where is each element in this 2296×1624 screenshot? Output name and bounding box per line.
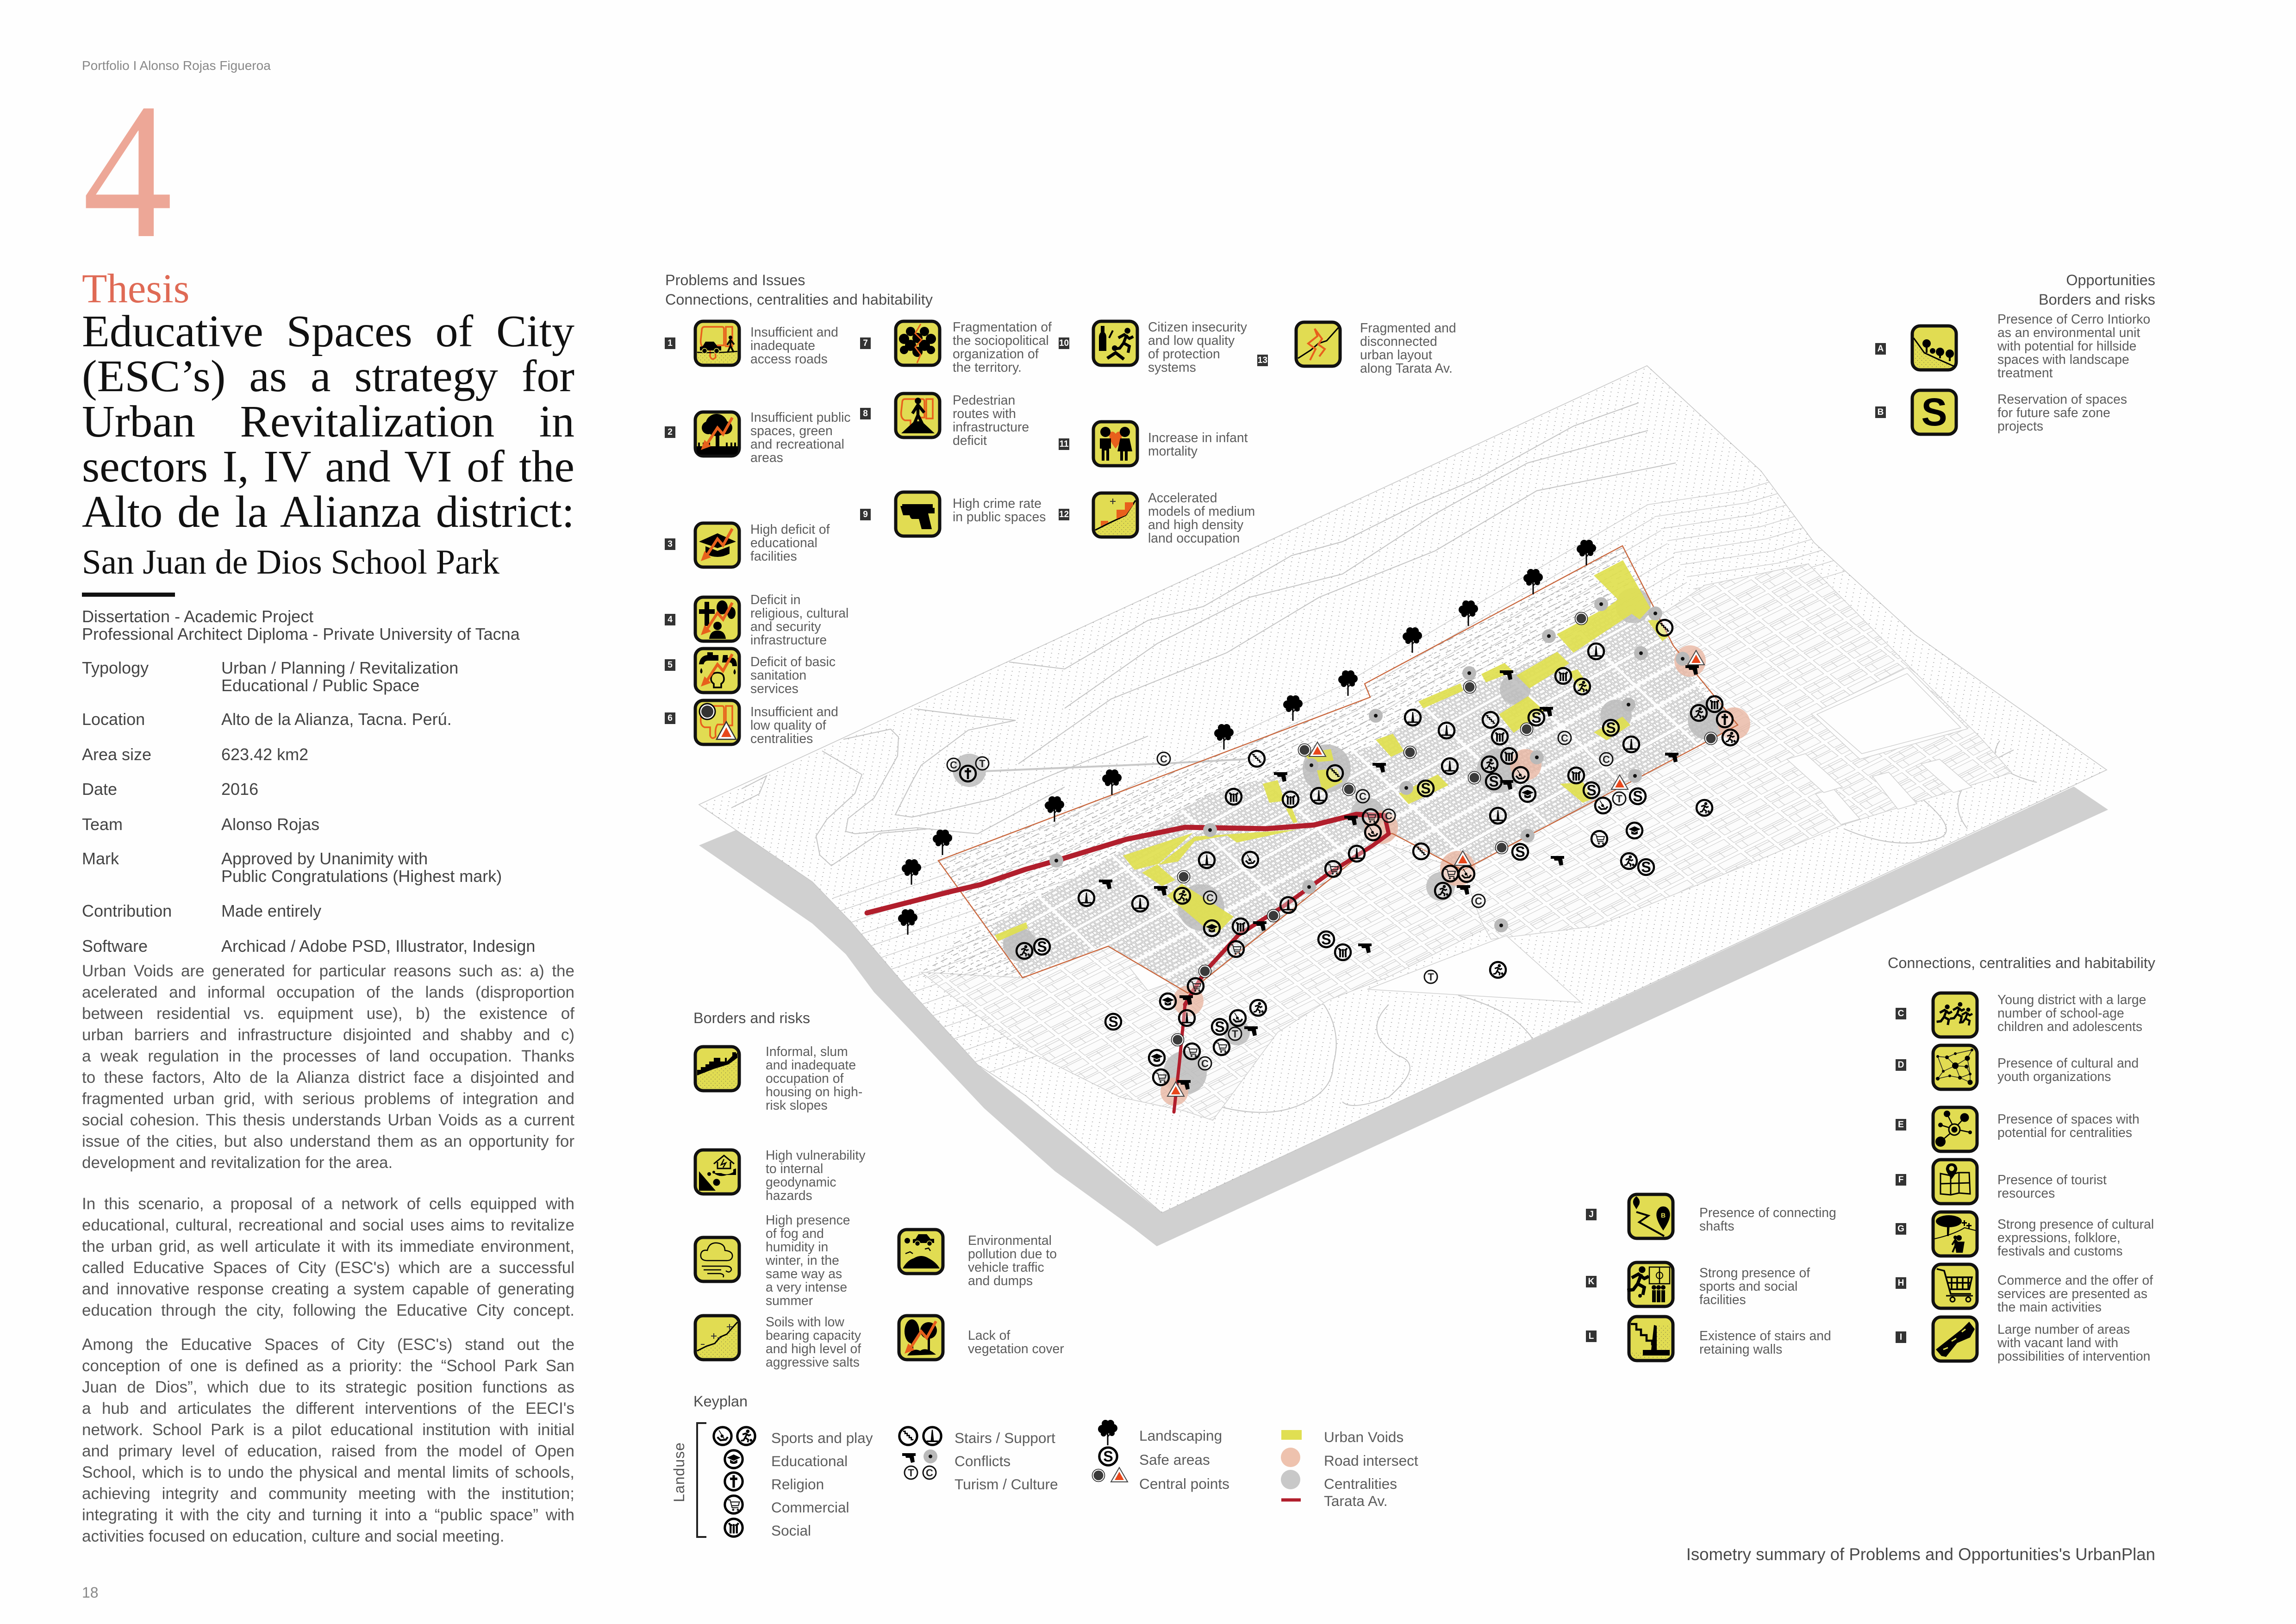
- area and route swatches: [1273, 1421, 1310, 1509]
- text: commerce: Commerce and the offer of services are presented as the main activities: [1997, 1273, 2153, 1314]
- tourism and culture markers: T: [1428, 971, 1434, 983]
- text: vegetation: Lack of vegetation cover: [968, 1328, 1064, 1356]
- date: [82, 781, 574, 798]
- area size: 623.42 km2: [221, 745, 308, 764]
- paragraph 3: Juan de Dios”, which due to its strategic position functions as: [82, 1378, 574, 1396]
- icon: insecurity scene: [1092, 319, 1139, 367]
- contribution: Contribution: [82, 901, 172, 920]
- paragraph 2: educational, cultural, recreational and social uses aims to revitalize: [82, 1216, 574, 1234]
- icon: tree, crosses and dancers: [1931, 1210, 1979, 1258]
- stairs, conflicts and tourism labels: Stairs / Support Conflicts Turism / Culture: [955, 1430, 1058, 1493]
- legend symbols: [671, 1389, 1134, 1546]
- mark: Approved by Unanimity with Public Congratulations (Highest mark): [221, 849, 502, 886]
- safe area S markers: S: [1641, 859, 1651, 875]
- badge 6: [665, 712, 675, 724]
- paragraph 3: [82, 1334, 574, 1547]
- badge B: [1875, 406, 1886, 418]
- trees landscaping: [898, 540, 1596, 935]
- icon: vacant land strip: [1931, 1315, 1979, 1363]
- icon: hub and spokes: [1931, 1106, 1979, 1153]
- badge I: I: [1900, 1332, 1902, 1342]
- mark: Mark: [82, 849, 119, 868]
- text: crime rate: High crime rate in public spaces: [953, 496, 1046, 524]
- badge E: [1896, 1119, 1906, 1131]
- panel: problems and issues: [662, 269, 1463, 750]
- location: [82, 711, 574, 728]
- urban voids yellow areas: [995, 560, 1669, 941]
- icon: pistol: [894, 490, 942, 538]
- badge J: J: [1589, 1210, 1594, 1219]
- text: fragmented layout: Fragmented and disconnected urban layout along Tarata Av.: [1360, 320, 1456, 375]
- icon: faucets and bulb: [693, 647, 741, 694]
- badge 5: 5: [668, 660, 673, 670]
- icon: slum on slope: [693, 1045, 741, 1093]
- panel: thesis header: [79, 56, 579, 602]
- icon: safe zone S: S: [1921, 390, 1947, 434]
- paragraph 3: activities focused on education, culture and social meeting.: [82, 1527, 504, 1545]
- badge L: L: [1589, 1331, 1594, 1341]
- area size: Area size: [82, 745, 151, 764]
- portfolio line: Portfolio I Alonso Rojas Figueroa: [82, 58, 271, 73]
- stairs, support, conflicts, tourism symbols: C: [926, 1467, 933, 1479]
- badge 9: [860, 509, 871, 520]
- text: potential centralities: Presence of spaces with potential for centralities: [1997, 1112, 2140, 1140]
- text: connecting shafts: Presence of connecting shafts: [1699, 1205, 1836, 1233]
- borders heading: Borders and risks: [693, 1010, 810, 1026]
- location: Alto de la Alianza, Tacna. Perú.: [221, 710, 452, 729]
- icon: football and social: [1627, 1261, 1675, 1308]
- tourism and culture markers: C: [1475, 895, 1482, 907]
- badge 1: 1: [668, 338, 673, 348]
- team: [82, 816, 574, 833]
- text: sports and social: Strong presence of sports and social facilities: [1699, 1265, 1810, 1307]
- stairs and support markers: [1079, 620, 1672, 1026]
- text: tourist resources: Presence of tourist resources: [1997, 1172, 2107, 1200]
- contribution: [82, 902, 574, 920]
- paragraph 3: and primary level of education, raised from the model of Open: [82, 1442, 574, 1460]
- badge G: G: [1897, 1224, 1904, 1234]
- landscaping, safe areas and central points labels: Landscaping Safe areas Central points: [1139, 1427, 1229, 1492]
- software: [82, 937, 574, 955]
- icon: organizations network: [1931, 1043, 1979, 1091]
- text: public spaces: Insufficient public spaces, green and recreational areas: [750, 410, 851, 465]
- badge F: [1896, 1174, 1906, 1186]
- text: young district: Young district with a large number of school-age children and adolescents: [1997, 992, 2146, 1034]
- opportunities heading: Opportunities Borders and risks: [2039, 272, 2155, 308]
- icon: density slope: [1092, 491, 1139, 539]
- problems heading: Problems and Issues Connections, centralities and habitability: [665, 272, 933, 308]
- conflict pistol markers: [1099, 665, 1699, 1090]
- terrain contours: [731, 403, 2037, 1112]
- paragraph 2: the urban grid, as well articulate it with its immediate environment,: [82, 1237, 574, 1255]
- typology: Urban / Planning / Revitalization Educational / Public Space: [221, 658, 458, 695]
- safe area S markers: S: [1531, 709, 1541, 726]
- landuse symbols: [714, 1427, 755, 1537]
- badge 12: 12: [1059, 510, 1069, 519]
- landuse labels: Sports and play Educational Religion Commercial Social: [771, 1430, 873, 1539]
- dissertation lines: Dissertation - Academic Project Professional Architect Diploma - Private University of Tacna: [82, 607, 520, 643]
- badge H: H: [1898, 1278, 1904, 1288]
- text: sanitation: Deficit of basic sanitation services: [750, 654, 836, 696]
- centralities grey circles: [953, 588, 1728, 1094]
- icon: cloud and wind: [693, 1236, 741, 1283]
- badge 1: [665, 337, 675, 349]
- main title: Alto de la Alianza district:: [82, 487, 574, 537]
- paragraph 1: social cohesion. This thesis understands Urban Voids as a current: [82, 1111, 574, 1129]
- badge 9: 9: [863, 510, 868, 519]
- text: informal slum: Informal, slum and inadequate occupation of housing on high- risk slopes: [766, 1044, 862, 1112]
- badge L: [1586, 1330, 1597, 1342]
- icon: map and pin: [1931, 1158, 1979, 1206]
- icon: trees and zigzag: [897, 1314, 945, 1362]
- tourism and culture markers: C: [1603, 754, 1610, 765]
- paragraph 1: fragmented urban grid, with serious problems of integration and: [82, 1090, 574, 1108]
- date: Date: [82, 780, 117, 799]
- badge E: E: [1898, 1120, 1904, 1130]
- icon: cross, masks and bust: [693, 595, 741, 643]
- badge K: [1586, 1276, 1597, 1287]
- badge K: K: [1588, 1277, 1594, 1287]
- icon: connecting shaft: B: [1661, 1212, 1666, 1219]
- icon: car and thumb down: [693, 319, 741, 367]
- safe area S markers: S: [1215, 1018, 1225, 1035]
- text: Cerro Intiorko: Presence of Cerro Intiorko as an environmental unit with potential for hillside spaces with landscape treatment: [1997, 312, 2150, 380]
- landscaping, safe area, central point symbols: [1092, 1420, 1128, 1482]
- badge G: [1896, 1223, 1906, 1235]
- study area boundary: [938, 546, 1738, 993]
- text: pedestrian routes: Pedestrian routes with infrastructure deficit: [953, 393, 1029, 448]
- central points dark dots: [1171, 612, 1717, 1046]
- text: soils: Soils with low bearing capacity and high level of aggressive salts: [766, 1314, 861, 1369]
- badge A: A: [1878, 344, 1884, 354]
- team: Alonso Rojas: [221, 815, 319, 834]
- badge 8: 8: [863, 409, 868, 418]
- location: Location: [82, 710, 145, 729]
- panel: centre opportunities: [1583, 1190, 1842, 1366]
- badge 11: 11: [1059, 439, 1069, 449]
- icon: pedestrian: [894, 392, 942, 439]
- typology: [82, 659, 574, 677]
- paragraph 1: a weak regulation in the processes of land occupation. Thanks: [82, 1047, 574, 1065]
- text: citizen insecurity: Citizen insecurity and low quality of protection systems: [1148, 319, 1247, 375]
- tourism and culture markers: C: [950, 759, 957, 771]
- icon: tree and zigzag: [693, 410, 741, 458]
- stairs, support, conflicts, tourism symbols: T: [908, 1467, 914, 1479]
- icon: safe zone S: [1910, 388, 1958, 436]
- sparse hillside houses: [917, 546, 1738, 993]
- main title: (ESC’s) as a strategy for: [82, 351, 574, 401]
- main title: sectors I, IV and VI of the: [82, 442, 574, 492]
- road intersection peach circles: [1160, 645, 1750, 1106]
- paragraph 1: urban barriers and infrastructure disjointed and shabby and c): [82, 1026, 574, 1044]
- safe area S markers: S: [1586, 782, 1597, 799]
- landuse bracket and label: Landuse: [671, 1442, 687, 1502]
- text: cultural expressions: Strong presence of cultural expressions, folklore, festivals and customs: [1997, 1217, 2154, 1258]
- text: access roads: Insufficient and inadequate access roads: [750, 325, 838, 366]
- badge 7: 7: [863, 338, 868, 348]
- text: vacant land: Large number of areas with vacant land with possibilities of intervention: [1997, 1322, 2150, 1363]
- icon: connecting shaft: [1627, 1193, 1675, 1240]
- paragraph 2: [82, 1193, 574, 1321]
- connections heading: Connections, centralities and habitability: [1888, 955, 2155, 971]
- icon: crowd fragmentation: [894, 319, 942, 367]
- keyplan heading: Keyplan: [693, 1393, 748, 1410]
- landscaping, safe area, central point symbols: S: [1103, 1448, 1113, 1465]
- tourism and culture markers: C: [1201, 1058, 1209, 1069]
- text: pollution: Environmental pollution due to vehicle traffic and dumps: [968, 1233, 1057, 1288]
- tourism and culture markers: T: [1616, 793, 1622, 805]
- formal city blocks: [921, 564, 2012, 1120]
- paragraph 1: development and revitalization for the area.: [82, 1154, 393, 1172]
- text: infant mortality: Increase in infant mortality: [1148, 430, 1248, 458]
- typology: Typology: [82, 658, 149, 677]
- paragraph 2: In this scenario, a proposal of a network of cells equipped with: [82, 1195, 574, 1213]
- paragraph 1: acelerated and informal occupation of the lands (disproportion: [82, 983, 574, 1001]
- safe area S markers: S: [1421, 780, 1431, 797]
- main title: [82, 309, 574, 535]
- text: centralities: Insufficient and low quality of centralities: [750, 704, 838, 746]
- icon: graduation cap: [693, 521, 741, 569]
- mark: [82, 850, 574, 868]
- paragraph 2: and innovative response creating a system capable of generating: [82, 1280, 574, 1298]
- icon: geodynamic hazards: [693, 1148, 741, 1196]
- safe area S markers: S: [1108, 1013, 1118, 1030]
- title rule: [82, 593, 175, 597]
- badge C: [1896, 1008, 1906, 1019]
- icon: central point and triangle: [693, 699, 741, 746]
- hillside contour lines: [833, 463, 1885, 1093]
- tourism and culture markers: T: [979, 758, 986, 769]
- paragraph 1: Urban Voids are generated for particular reasons such as: a) the: [82, 962, 574, 980]
- map caption: Isometry summary of Problems and Opportunities's UrbanPlan: [1686, 1545, 2155, 1564]
- text: religious, cultural and security: Deficit in religious, cultural and security infrastructure: [750, 592, 849, 647]
- badge 2: [665, 426, 675, 438]
- tourism and culture markers: C: [1160, 753, 1167, 765]
- badge H: [1896, 1277, 1906, 1289]
- stairs, support, conflicts, tourism symbols: [899, 1427, 941, 1479]
- stippled terrain sheet: [699, 366, 2107, 1213]
- icon: hill with trees: [1910, 324, 1958, 372]
- connection line: [983, 759, 1245, 771]
- tourism and culture markers: C: [1359, 791, 1366, 802]
- page number: 18: [82, 1584, 99, 1601]
- badge 8: [860, 408, 871, 419]
- badge 4: [665, 614, 675, 625]
- panel: borders and risks: [690, 1005, 1106, 1375]
- panel: opportunities borders and risks: [1870, 269, 2157, 440]
- contribution: Made entirely: [221, 901, 321, 920]
- safe area S markers: S: [1489, 773, 1499, 790]
- safe area S markers: [1034, 709, 1654, 1035]
- central points grey dots: [1049, 597, 1690, 932]
- safe area S markers: S: [1037, 938, 1047, 955]
- dense informal housing fabric: [991, 616, 1717, 992]
- icon: running children: [1931, 991, 1979, 1039]
- grey base slab: [699, 787, 2108, 1246]
- urban voids, road intersect and centralities labels: Urban Voids Road intersect Centralities: [1324, 1429, 1418, 1492]
- safe area S markers: S: [1321, 931, 1331, 948]
- badge 13: 13: [1258, 356, 1267, 365]
- safe area S markers: S: [1515, 843, 1525, 860]
- text: safe zones: Reservation of spaces for future safe zone projects: [1997, 392, 2127, 433]
- panel: project data: [79, 606, 579, 958]
- subtitle: San Juan de Dios School Park: [82, 543, 499, 581]
- badge J: [1586, 1209, 1597, 1220]
- chapter number: 4: [82, 63, 173, 278]
- sports markers: [1017, 679, 1738, 1026]
- badge 3: 3: [668, 539, 673, 549]
- software: Archicad / Adobe PSD, Illustrator, Indesign: [221, 937, 535, 956]
- paragraph 2: called Educative Spaces of City (ESC's) which are a successful: [82, 1259, 574, 1277]
- paragraph 1: [82, 961, 574, 1174]
- software: Software: [82, 937, 148, 956]
- isometric urban plan map: [698, 365, 2108, 1246]
- panel: thesis description: [79, 958, 579, 1546]
- badge I: [1896, 1331, 1906, 1343]
- icon: stairs and wall: [1627, 1315, 1675, 1362]
- badge 4: 4: [668, 615, 673, 625]
- badge 2: 2: [668, 427, 673, 437]
- tourism and culture markers: C: [1206, 892, 1214, 904]
- text: stairs and walls: Existence of stairs and retaining walls: [1699, 1328, 1831, 1356]
- date: 2016: [221, 780, 258, 799]
- icon: car and dump: [897, 1228, 945, 1275]
- icon: soil salts: [693, 1314, 741, 1362]
- paragraph 3: achieving integrity and community meeting with the institution;: [82, 1485, 574, 1503]
- badge A: [1875, 343, 1886, 355]
- Tarata Av. red road: [867, 814, 1389, 1112]
- landuse bracket and label: [671, 1423, 706, 1537]
- badge B: B: [1878, 407, 1884, 417]
- icon: fragmented layout: [1294, 320, 1342, 368]
- main title: Educative Spaces of City: [82, 306, 574, 356]
- team: Team: [82, 815, 123, 834]
- panel: connections, centralities and habitability opportunities: [1884, 949, 2157, 1366]
- area size: [82, 746, 574, 763]
- paragraph 3: network. School Park is a pilot educational institution with initial: [82, 1421, 574, 1439]
- text: land occupation: Accelerated models of medium and high density land occupation: [1148, 490, 1255, 545]
- paragraph 3: School, which is to undo the physical and mental limits of schools,: [82, 1463, 574, 1481]
- tourism and culture markers: [947, 731, 1626, 1070]
- badge F: F: [1898, 1175, 1903, 1185]
- paragraph 1: issue of the cities, but also understand them as an opportunity for: [82, 1132, 574, 1150]
- social, educational, commercial and religion markers: [960, 668, 1733, 1085]
- paragraph 1: between residential vs. equipment use), b) the existence of: [82, 1005, 574, 1023]
- icon: shopping cart: [1931, 1262, 1979, 1310]
- paragraph 3: conception of one is defined as a priority: the “School Park San: [82, 1357, 574, 1375]
- text: geodynamic hazards: High vulnerability to internal geodynamic hazards: [766, 1148, 865, 1203]
- thesis label: Thesis: [82, 266, 189, 312]
- text: cultural and youth: Presence of cultural and youth organizations: [1997, 1056, 2139, 1084]
- panel: keyplan legend: [671, 1389, 1458, 1546]
- badge D: D: [1898, 1060, 1904, 1070]
- paragraph 1: to these factors, Alto de la Alianza district face a disjointed and: [82, 1068, 574, 1087]
- central point triangles: [1167, 650, 1704, 1096]
- badge 10: 10: [1059, 338, 1069, 348]
- badge 3: [665, 538, 675, 550]
- safe area S markers: S: [1633, 788, 1643, 805]
- tourism and culture markers: C: [1385, 810, 1392, 822]
- tourism and culture markers: C: [1561, 732, 1568, 744]
- paragraph 3: a hub and articulates the different interventions of the EECI's: [82, 1399, 574, 1418]
- badge 5: [665, 659, 675, 671]
- safe area S markers: S: [1606, 719, 1616, 736]
- paragraph 3: Among the Educative Spaces of City (ESC's) stand out the: [82, 1336, 574, 1354]
- icon: two children: [1092, 420, 1139, 468]
- main title: Urban Revitalization in: [82, 397, 574, 447]
- badge 7: [860, 337, 871, 349]
- text: sociopolitical: Fragmentation of the sociopolitical organization of the territory.: [953, 319, 1052, 375]
- tourism and culture markers: T: [1232, 1028, 1238, 1040]
- text: fog and humidity: High presence of fog and humidity in winter, in the same way as a very intense summer: [766, 1212, 850, 1308]
- badge D: [1896, 1059, 1906, 1071]
- paragraph 3: integrating it with the city and turning it into a “public space” with: [82, 1506, 574, 1524]
- text: educational facilities: High deficit of educational facilities: [750, 522, 830, 563]
- badge 6: 6: [668, 713, 673, 723]
- Tarata Av label: Tarata Av.: [1324, 1493, 1388, 1509]
- paragraph 2: education through the city, following the Educative City concept.: [82, 1301, 574, 1319]
- badge C: C: [1898, 1009, 1904, 1018]
